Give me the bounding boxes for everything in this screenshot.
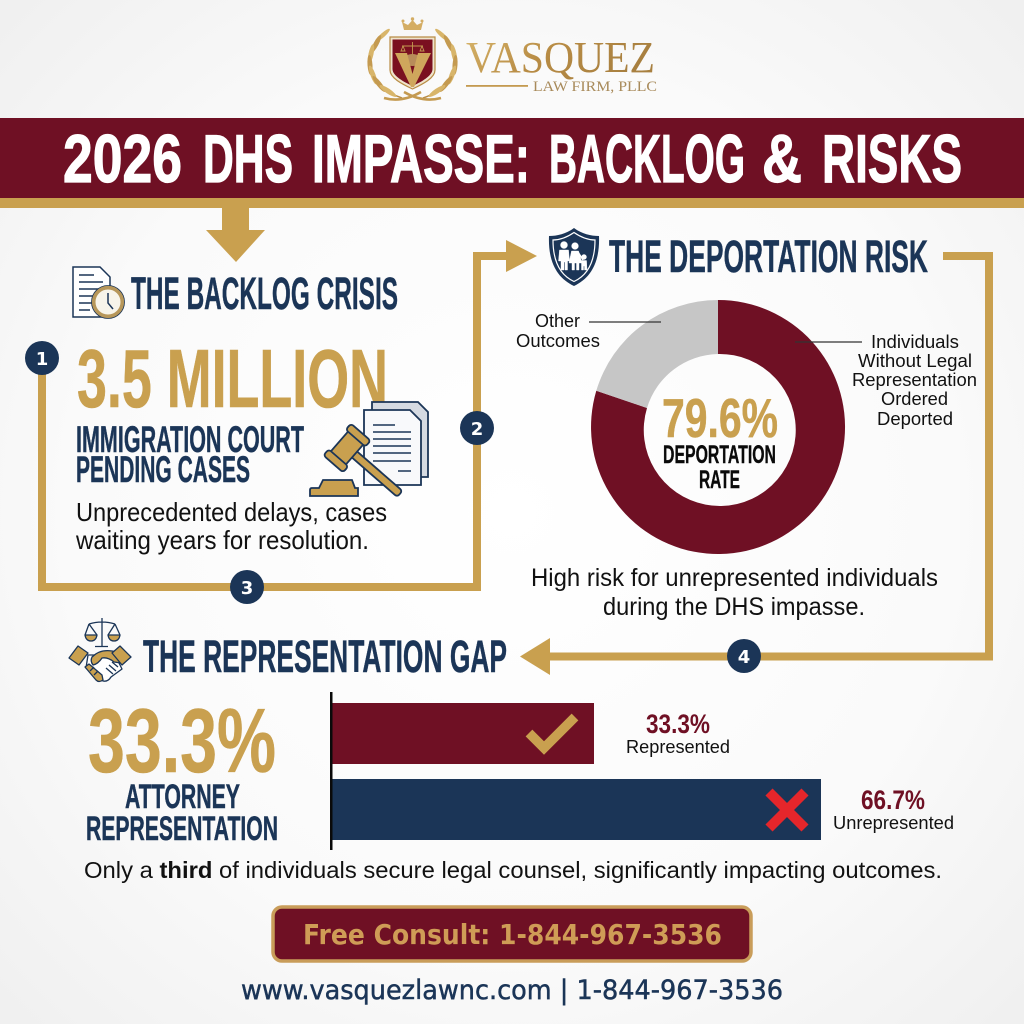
step badge 4: 4	[738, 647, 750, 668]
step badge 1: 1	[36, 349, 48, 370]
stat: 3.5 million: 3.5 MILLION	[77, 332, 388, 425]
step badge 1	[25, 341, 59, 375]
step badge 3: 3	[241, 578, 253, 599]
bar: represented	[332, 703, 594, 764]
icon: right laurel	[404, 27, 459, 100]
label: other outcomes: Other	[535, 311, 580, 331]
donut segment: other outcomes	[596, 300, 718, 408]
chart axis	[330, 692, 332, 850]
arrowhead: to deportation risk	[506, 240, 537, 272]
label: individuals without representation: Without Legal	[858, 351, 972, 371]
icon: scales and handshake	[69, 618, 131, 682]
icon: gavel and papers	[310, 402, 428, 510]
donut center label: DEPORTATION	[663, 441, 776, 469]
title: RISKS	[822, 121, 962, 197]
icon: left laurel	[366, 27, 421, 100]
stat label: REPRESENTATION	[86, 810, 278, 848]
label: individuals without representation: Ordered	[881, 389, 948, 409]
description	[531, 564, 938, 621]
donut segment: deported 79.6%	[591, 300, 845, 554]
label: individuals without representation: Individuals	[871, 332, 959, 352]
subheading: IMMIGRATION COURT	[76, 419, 304, 460]
step badge 3	[230, 570, 264, 604]
heading: THE REPRESENTATION GAP	[143, 631, 507, 682]
title: 2026	[63, 121, 182, 197]
donut chart	[591, 300, 845, 554]
title: DHS	[203, 121, 293, 197]
icon: check mark	[529, 717, 575, 748]
subheading	[76, 419, 304, 490]
panel: the backlog crisis	[73, 267, 428, 555]
bar value: represented: 33.3%	[646, 709, 710, 739]
stat label	[86, 778, 278, 848]
title: IMPASSE:	[312, 121, 530, 197]
step badge 2: 2	[471, 419, 483, 440]
donut center value: 79.6%	[662, 387, 778, 449]
bar chart	[330, 692, 954, 850]
bar: unrepresented	[332, 779, 821, 840]
description: Only a third of individuals secure legal counsel, significantly impacting outcomes.	[84, 857, 942, 883]
icon: red cross	[769, 792, 805, 828]
label: individuals without representation: Representation	[852, 370, 977, 390]
logo: Vasquez Law Firm	[366, 17, 657, 100]
description: Unprecedented delays, cases	[76, 497, 387, 527]
description	[75, 497, 387, 555]
label: individuals without representation: Deported	[877, 409, 953, 429]
bar value: represented	[626, 709, 730, 757]
icon: crown	[402, 17, 424, 30]
icon: document with clock	[73, 267, 124, 318]
donut center label: RATE	[699, 466, 740, 494]
arrow: down from banner	[206, 208, 265, 262]
arrow: connector from deportation to representation	[548, 256, 989, 656]
bar value: unrepresented: 66.7%	[861, 785, 925, 815]
icon: family shield	[549, 228, 599, 286]
footer contact line: www.vasquezlawnc.com | 1-844-967-3536	[241, 975, 783, 1006]
description: waiting years for resolution.	[75, 525, 369, 555]
description: High risk for unrepresented individuals	[531, 564, 938, 592]
panel: the deportation risk	[516, 228, 977, 621]
heading: THE BACKLOG CRISIS	[131, 268, 398, 319]
panel: the representation gap	[69, 618, 954, 883]
icon: crest shield	[390, 37, 435, 89]
description: during the DHS impasse.	[603, 593, 865, 621]
call to action button: Free Consult: 1-844-967-3536	[303, 918, 722, 951]
arrow: connector from backlog to deportation	[42, 256, 510, 587]
step badge 2	[460, 411, 494, 445]
title: &	[762, 121, 802, 197]
wordmark rule	[466, 85, 528, 87]
bar value: unrepresented: Unrepresented	[833, 813, 954, 833]
arrowhead: to representation gap	[520, 638, 550, 675]
title: BACKLOG	[549, 121, 745, 197]
stat: 33.3%: 33.3%	[88, 691, 276, 792]
label: other outcomes: Outcomes	[516, 331, 600, 351]
title banner	[0, 118, 1024, 208]
label: individuals without representation	[795, 332, 977, 429]
donut center label	[663, 441, 776, 494]
call to action button	[273, 907, 751, 961]
bar value: unrepresented	[833, 785, 954, 833]
stat label: ATTORNEY	[125, 778, 240, 816]
label: other outcomes	[516, 311, 661, 351]
wordmark VASQUEZ: VASQUEZ	[466, 33, 655, 82]
subheading: PENDING CASES	[76, 449, 250, 490]
wordmark LAW FIRM, PLLC: LAW FIRM, PLLC	[533, 79, 657, 95]
step badge 4	[727, 639, 761, 673]
bar value: represented: Represented	[626, 737, 730, 757]
